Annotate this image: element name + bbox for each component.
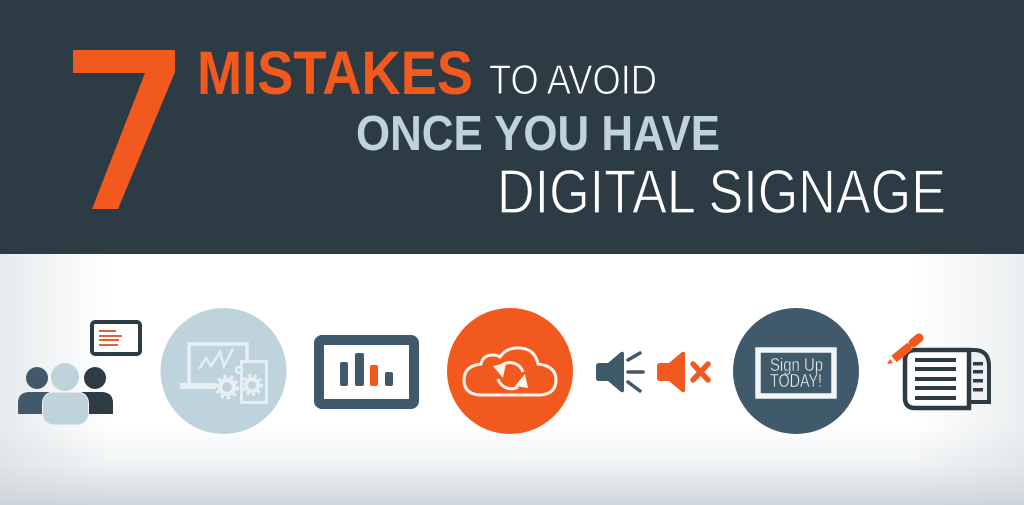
icon: cloud sync circle [447, 308, 573, 434]
icon: analytics circle [160, 308, 286, 434]
icon: document with pencil [887, 338, 989, 408]
icon: sign up circle: TODAY! [770, 371, 822, 391]
title: TO AVOID [489, 56, 657, 103]
icon: bar chart display [319, 340, 414, 404]
lower background [0, 254, 1024, 505]
numeral 7 [73, 50, 175, 209]
title: MISTAKES [197, 39, 473, 107]
title: DIGITAL SIGNAGE [497, 158, 946, 227]
icon: sign up circle [733, 308, 859, 434]
title [197, 39, 946, 227]
icon: sign up circle: Sign Up [770, 355, 823, 375]
icon: speaker on [596, 352, 643, 392]
title: ONCE YOU HAVE [356, 107, 720, 161]
header band [0, 0, 1024, 254]
icon: speaker muted [657, 352, 708, 392]
icon: audience with tablet [18, 322, 140, 425]
